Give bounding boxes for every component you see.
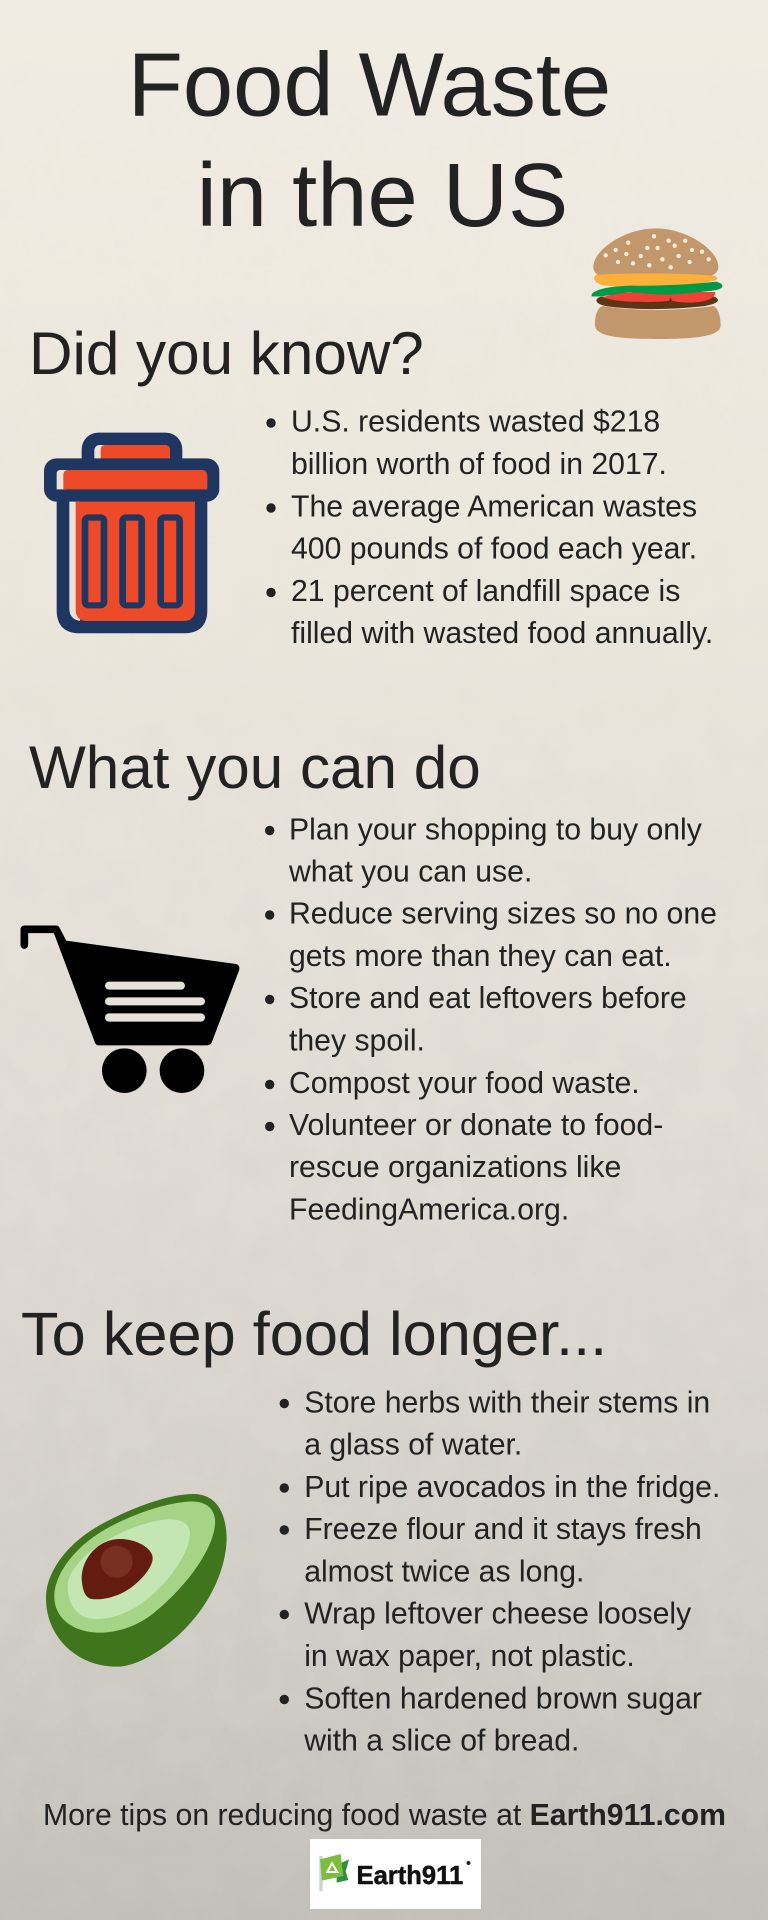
- bullet list: actions: they spoil.: [289, 1024, 425, 1058]
- icon: burger: [592, 228, 722, 339]
- icon: green flag: [319, 1854, 349, 1891]
- bullet list: tips: [280, 1386, 720, 1758]
- footer text: More tips on reducing food waste at Earth911.com: [43, 1799, 726, 1832]
- bullet list: actions: rescue organizations like: [289, 1151, 621, 1184]
- panel: did you know: [29, 320, 713, 650]
- logo: Earth911: Earth911: [356, 1862, 463, 1890]
- panel: what you can do: [24, 734, 717, 1226]
- heading: what you can do: What you can do: [29, 734, 481, 801]
- bullet list: actions: Plan your shopping to buy only: [289, 814, 703, 846]
- bullet list: actions: gets more than they can eat.: [289, 940, 672, 973]
- title: Food Waste: [128, 34, 611, 136]
- icon: avocado: [46, 1494, 227, 1667]
- bullet list: tips: Soften hardened brown sugar: [304, 1682, 702, 1716]
- bullet list: tips: almost twice as long.: [304, 1556, 584, 1588]
- bullet list: tips: Store herbs with their stems in: [304, 1386, 710, 1420]
- icon: shopping cart: [24, 929, 239, 1093]
- bullet list: facts: The average American wastes: [291, 490, 697, 524]
- bullet list: actions: [265, 814, 717, 1226]
- bullet list: facts: 400 pounds of food each year.: [291, 532, 697, 566]
- heading: to keep food longer: To keep food longer...: [21, 1300, 607, 1368]
- bullet list: actions: FeedingAmerica.org.: [289, 1194, 569, 1226]
- bullet list: facts: filled with wasted food annually.: [291, 617, 713, 650]
- title: in the US: [197, 145, 568, 246]
- bullet list: actions: Reduce serving sizes so no one: [289, 898, 717, 931]
- bullet list: actions: Volunteer or donate to food-: [289, 1109, 663, 1142]
- bullet list: tips: Put ripe avocados in the fridge.: [304, 1471, 720, 1504]
- panel: to keep food longer: [21, 1300, 720, 1758]
- bullet list: actions: Store and eat leftovers before: [289, 982, 687, 1015]
- bullet list: tips: with a slice of bread.: [303, 1724, 579, 1758]
- bullet list: actions: Compost your food waste.: [289, 1067, 640, 1100]
- bullet list: tips: a glass of water.: [304, 1428, 522, 1462]
- bullet list: facts: billion worth of food in 2017.: [291, 448, 667, 481]
- icon: trash can: [44, 433, 219, 633]
- bullet list: tips: Freeze flour and it stays fresh: [304, 1513, 702, 1546]
- heading: did you know: Did you know?: [29, 320, 424, 387]
- bullet list: facts: 21 percent of landfill space is: [291, 575, 680, 608]
- bullet list: tips: Wrap leftover cheese loosely: [304, 1598, 692, 1630]
- bullet list: facts: [266, 406, 713, 650]
- bullet list: actions: what you can use.: [288, 856, 532, 888]
- bullet list: facts: U.S. residents wasted $218: [291, 406, 660, 438]
- logo: Earth911: [310, 1839, 481, 1909]
- title: [128, 34, 611, 246]
- registered mark: [466, 1861, 470, 1865]
- bullet list: tips: in wax paper, not plastic.: [304, 1640, 635, 1673]
